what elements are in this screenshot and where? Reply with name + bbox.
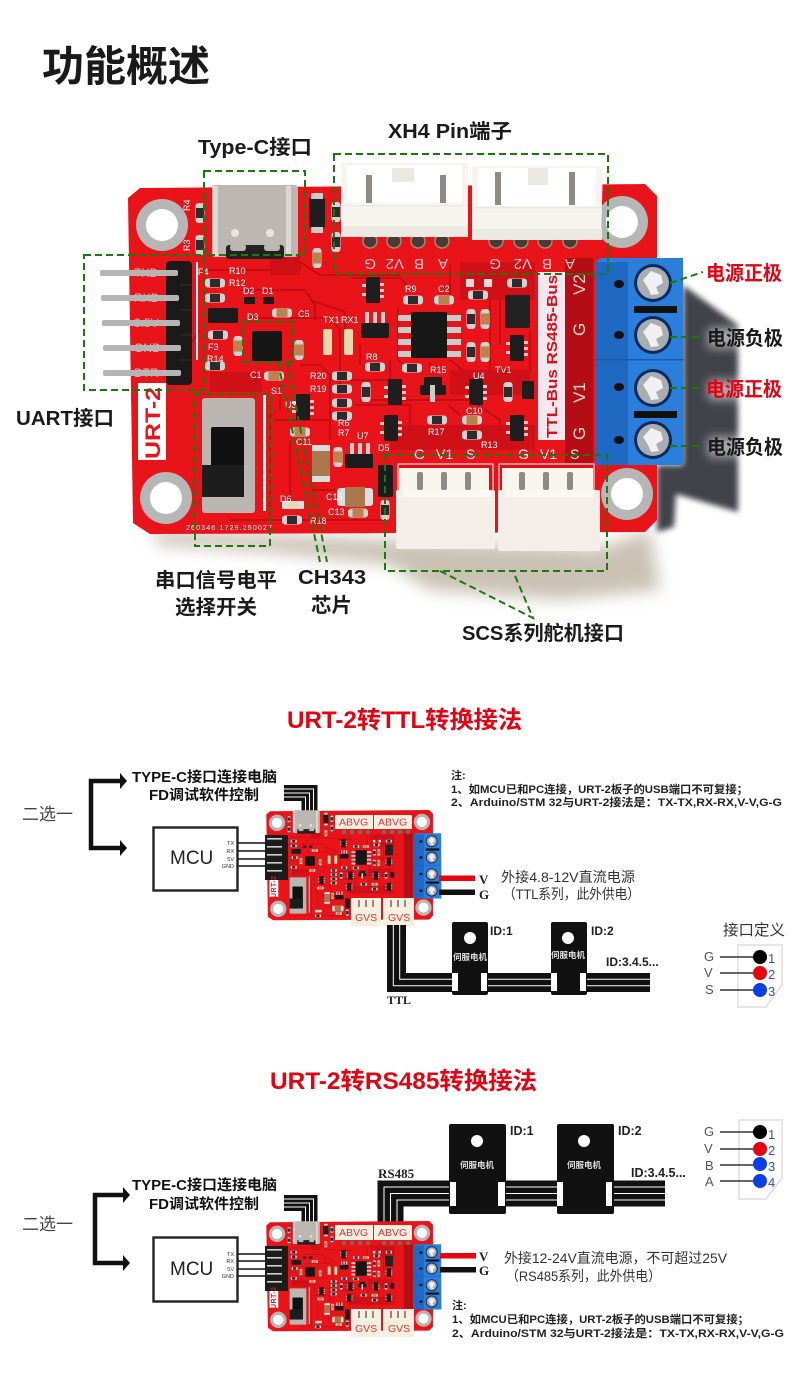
Type-C connection text: TYPE-C接口连接电脑 [132,1176,277,1194]
board silkscreen labels: F3 [208,342,219,352]
ABVG labels [335,1225,412,1240]
board silkscreen labels: R18 [310,516,327,526]
board silkscreen labels: U7 [357,431,369,441]
pinout: G V S: 2 [768,967,775,982]
board silkscreen labels: TV1 [495,365,512,375]
servo connectors: V1 [540,446,557,462]
heading: RS485 wiring: URT-2转RS485转换接法 [270,1068,537,1095]
board silkscreen labels: DTR [134,366,159,380]
circuit board [100,163,684,551]
label: SCS: SCS系列舵机接口 [462,621,624,645]
servo IDs: ID:3.4.5... [606,955,659,969]
choose one label: 二选一 [22,1215,73,1234]
Type-C connection text [132,1176,277,1213]
servo 2 [551,922,587,995]
MCU box: 5V [227,1267,234,1273]
label: level switch: 串口信号电平 [155,569,277,592]
heading: TTL wiring: URT-2转TTL转换接法 [287,707,522,734]
board silkscreen labels: C15 [326,492,343,502]
panel: RS485 wiring diagram: RS485 [378,1166,415,1181]
Type-C connection text: FD调试软件控制 [149,1195,259,1213]
servo 2: 伺服电机 [567,1160,601,1170]
servo 1 [449,1124,506,1214]
board silkscreen labels: C13 [328,507,345,517]
Type-C connection text: FD调试软件控制 [149,786,259,804]
board silkscreen labels: D2 [243,286,255,296]
connector pin labels (top): A [438,255,448,272]
board silkscreen labels: R9 [405,284,417,294]
board silkscreen labels: C1 [250,370,262,380]
board silkscreen labels: C11 [296,437,312,447]
board name: URT-2 [142,387,165,459]
pinout: G V B A: 2 [768,1143,775,1158]
board silkscreen labels: C2 [438,284,450,294]
panel: TTL wiring diagram: TTL [387,993,411,1007]
GVS labels: GVS [388,1323,410,1335]
pinout: G V S: 3 [768,984,775,999]
GVS labels: GVS [388,912,410,924]
board silkscreen labels: F4 [198,267,209,277]
connector pin labels (top): B [542,255,552,272]
title: 功能概述 [42,43,210,90]
servo IDs [490,924,659,969]
servo IDs [510,1124,686,1180]
notes: 1、如MCU已和PC连接，URT-2板子的USB端口不可复接； [451,782,748,796]
servo 1: 伺服电机 [453,952,487,962]
GVS labels: GVS [355,1323,377,1335]
label: level switch: 选择开关 [175,596,257,619]
MCU box: MCU [170,848,213,869]
terminal polarity labels: V1 [570,382,589,403]
servo IDs: ID:2 [618,1124,642,1138]
board silkscreen labels: TX1 [323,315,340,325]
label: CH343 [298,567,366,617]
module name strip [538,272,565,440]
board silkscreen labels: D6 [280,494,292,504]
pinout: G V B A: 3 [768,1159,775,1174]
terminal polarity labels: G [570,323,589,336]
board silkscreen labels: R7 [338,428,350,438]
module name strip: TTL-Bus RS485-Bus [544,275,561,438]
board silkscreen labels [134,199,589,532]
servo connectors: G [414,446,425,462]
notes: 1、如MCU已和PC连接，URT-2板子的USB端口不可复接； [452,1312,749,1326]
servo connectors [396,446,600,551]
label: XH4: XH4 Pin端子 [388,120,512,143]
connector pin labels (top): G [364,255,376,272]
TTL bus cable [393,925,650,986]
small board: URT-2 [271,876,278,898]
board silkscreen labels: TXD [134,266,158,280]
pinout: G V S: 1 [768,951,775,966]
power wires [440,1249,489,1278]
connector pin labels (top): G [489,255,501,272]
small board: URT-2 [271,1287,278,1309]
GVS labels: GVS [355,912,377,924]
board silkscreen labels: R17 [428,427,445,437]
board silkscreen labels: D3 [247,312,259,322]
power wires: V [479,1249,489,1264]
notes: 注: [451,768,466,782]
board silkscreen labels: R15 [430,365,447,375]
board silkscreen labels: R3 [182,239,192,251]
ABVG labels: ABVG [339,816,368,828]
servo IDs: ID:1 [510,1124,534,1138]
MCU box [154,1238,268,1302]
servo connectors: V1 [436,446,453,462]
pinout: G V S: S [705,982,714,997]
board silkscreen labels: S1 [271,386,282,396]
MCU box: RX [226,849,234,855]
board silkscreen labels: C5 [298,309,310,319]
GVS labels [355,912,410,924]
label: CH343: CH343 [298,567,366,589]
arrow bracket [91,773,127,856]
label: CH343: 芯片 [311,594,352,617]
servo 2 [557,1124,614,1214]
board silkscreen labels: RX1 [341,315,359,325]
board silkscreen labels: C10 [466,406,483,416]
ABVG labels: ABVG [339,1227,368,1239]
label: level switch [155,569,277,619]
board silkscreen labels: R19 [310,384,327,394]
label halos [708,328,788,457]
RS485 bus cable [384,1187,665,1228]
Type-C connection text: TYPE-C接口连接电脑 [132,768,277,786]
label: UART: UART接口 [16,407,114,430]
small board [265,1221,441,1337]
green dashed callout frames [84,154,703,618]
pinout: G V S: G [704,949,714,964]
power wires: V [479,872,489,887]
board silkscreen labels: 260346.1729.250027 [186,525,272,532]
board silkscreen labels: R4 [182,199,192,211]
board silkscreen labels: RXD [134,291,160,305]
notes: 2、Arduino/STM 32与URT-2接法是：TX-TX,RX-RX,V-V,G-G [452,1326,784,1340]
power wires: G [479,1263,489,1278]
board silkscreen labels: 3.5V [134,316,159,330]
panel: TTL wiring diagram [22,768,785,1007]
servo connectors: G [518,446,529,462]
power supply note: 外接4.8-12V直流电源 [501,869,635,885]
board silkscreen labels: R10 [229,266,246,276]
label: Type-C: Type-C接口 [198,136,312,159]
servo IDs: ID:3.4.5... [631,1166,686,1180]
MCU box: RX [226,1259,234,1265]
board silkscreen labels: GND [134,341,161,355]
pinout: G V B A: 1 [768,1127,775,1142]
labels: power terminals [706,262,783,459]
Type-C connection text [132,768,277,804]
connector pin labels (top): B [414,255,424,272]
power wires: G [479,887,489,902]
MCU box: GND [222,1274,234,1280]
MCU box [154,828,268,890]
board silkscreen labels: R12 [229,278,246,288]
connector pin labels (top): V2 [386,255,404,272]
power supply note: （RS485系列，此外供电） [506,1268,661,1284]
connector pin labels (top): V2 [514,255,532,272]
connector pin labels (top) [364,255,575,272]
power supply note: （TTL系列，此外供电） [503,886,640,902]
GVS labels [355,1323,410,1335]
interface definition heading: 接口定义 [723,922,785,939]
labels: power terminals: 电源正极 [706,262,782,285]
pinout: G V S: V [704,965,713,980]
pinout: G V B A: V [704,1141,713,1156]
board silkscreen labels: D5 [378,443,390,453]
pinout: G V B A: G [704,1124,714,1139]
MCU box: TX [227,1252,234,1258]
notes: 2、Arduino/STM 32与URT-2接法是：TX-TX,RX-RX,V-V,G-G [451,795,782,809]
UART pin header [100,261,198,385]
power supply note [504,1250,728,1284]
XH4 connectors [341,163,603,248]
terminal polarity labels [570,274,589,440]
pinout: G V B A: 4 [768,1175,775,1190]
MCU box: MCU [170,1259,213,1280]
servo IDs: ID:1 [490,924,513,938]
MCU box: GND [222,864,234,870]
connector pin labels (top): A [565,255,575,272]
ABVG labels: ABVG [378,1227,407,1239]
USB cable [284,789,314,818]
labels: power terminals: 电源正极 [706,378,782,401]
board silkscreen labels: D1 [262,286,274,296]
notes [451,768,782,809]
pinout: G V B A [704,1120,782,1199]
servo 2: 伺服电机 [551,950,585,960]
notes [452,1298,784,1340]
board silkscreen labels: R8 [366,352,378,362]
board silkscreen labels: R6 [338,418,350,428]
small board [265,810,441,926]
USB cable [284,1199,314,1228]
labels: power terminals: 电源负极 [707,327,783,350]
servo connectors: S [570,446,579,462]
power wires [439,872,489,902]
pinout: G V S [704,945,782,1007]
ABVG labels: ABVG [378,816,407,828]
board silkscreen labels: R20 [310,371,327,381]
panel: RS485 wiring diagram [22,1120,784,1340]
servo connectors: S [466,446,475,462]
pinout: G V B A: B [705,1158,714,1173]
board silkscreen labels: U4 [473,371,485,381]
servo 1 [452,922,488,995]
labels: power terminals: 电源负极 [707,436,783,459]
arrow bracket [95,1187,130,1271]
pinout: G V B A: A [705,1174,714,1189]
board silkscreen labels: R13 [481,440,498,450]
power supply note [501,869,640,902]
servo 1: 伺服电机 [460,1160,494,1170]
choose one label: 二选一 [22,805,73,824]
MCU box: TX [227,841,234,847]
power supply note: 外接12-24V直流电源，不可超过25V [504,1250,728,1266]
terminal polarity labels: V2 [570,274,589,295]
board silkscreen labels: U3 [285,400,297,410]
board silkscreen labels: R14 [207,354,224,364]
terminal polarity labels: G [570,427,589,440]
MCU box: 5V [227,857,234,863]
servo IDs: ID:2 [591,924,614,938]
ABVG labels [335,815,412,829]
notes: 注: [452,1298,467,1312]
